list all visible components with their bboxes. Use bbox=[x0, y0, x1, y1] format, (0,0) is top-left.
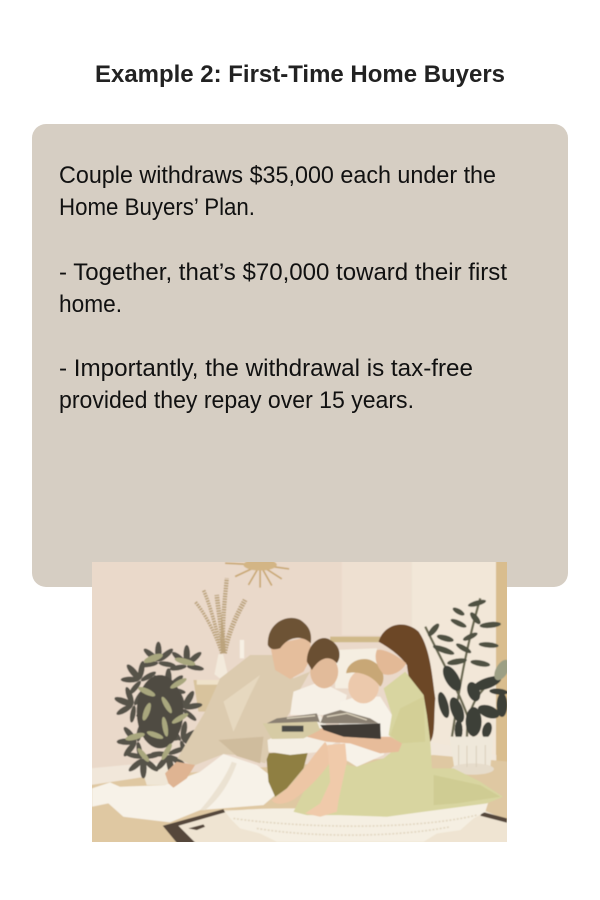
photo: family reading a book bbox=[92, 562, 507, 842]
floor bbox=[90, 755, 510, 848]
mother arm bbox=[307, 728, 402, 753]
right plant bbox=[425, 598, 513, 740]
headboard bbox=[330, 637, 380, 642]
text block: example details: home. bbox=[59, 291, 122, 318]
mother dress bbox=[293, 672, 503, 817]
text block: example details: - Importantly, the withdrawal is tax-free bbox=[59, 355, 473, 382]
boy olive trousers bbox=[266, 750, 309, 797]
rug bbox=[225, 801, 489, 842]
girl legs bbox=[272, 742, 334, 804]
right pot bbox=[450, 737, 493, 768]
man hand bbox=[165, 762, 195, 788]
mother face bbox=[376, 650, 406, 675]
left plant bbox=[109, 642, 209, 778]
man head bbox=[270, 637, 311, 679]
panel: example description bbox=[32, 124, 568, 587]
title: Example 2: First-Time Home Buyers bbox=[95, 61, 505, 88]
text block: example details: provided they repay over 15 years. bbox=[59, 387, 414, 414]
sunburst bbox=[225, 559, 289, 588]
side table bbox=[193, 680, 223, 712]
girl body bbox=[339, 697, 392, 767]
text block: example details bbox=[59, 162, 507, 414]
man white trousers bbox=[92, 754, 275, 822]
text block: example details: Home Buyers’ Plan. bbox=[59, 194, 255, 221]
pampas bbox=[195, 578, 245, 653]
man shirt bbox=[177, 655, 310, 766]
mother hair behind bbox=[379, 625, 435, 742]
book bbox=[263, 721, 320, 739]
boy bbox=[290, 682, 347, 715]
left plant pot bbox=[140, 763, 173, 785]
text block: example details: Couple withdraws $35,000 each under the bbox=[59, 162, 496, 189]
text block: example details: - Together, that’s $70,000 toward their first bbox=[59, 259, 507, 286]
